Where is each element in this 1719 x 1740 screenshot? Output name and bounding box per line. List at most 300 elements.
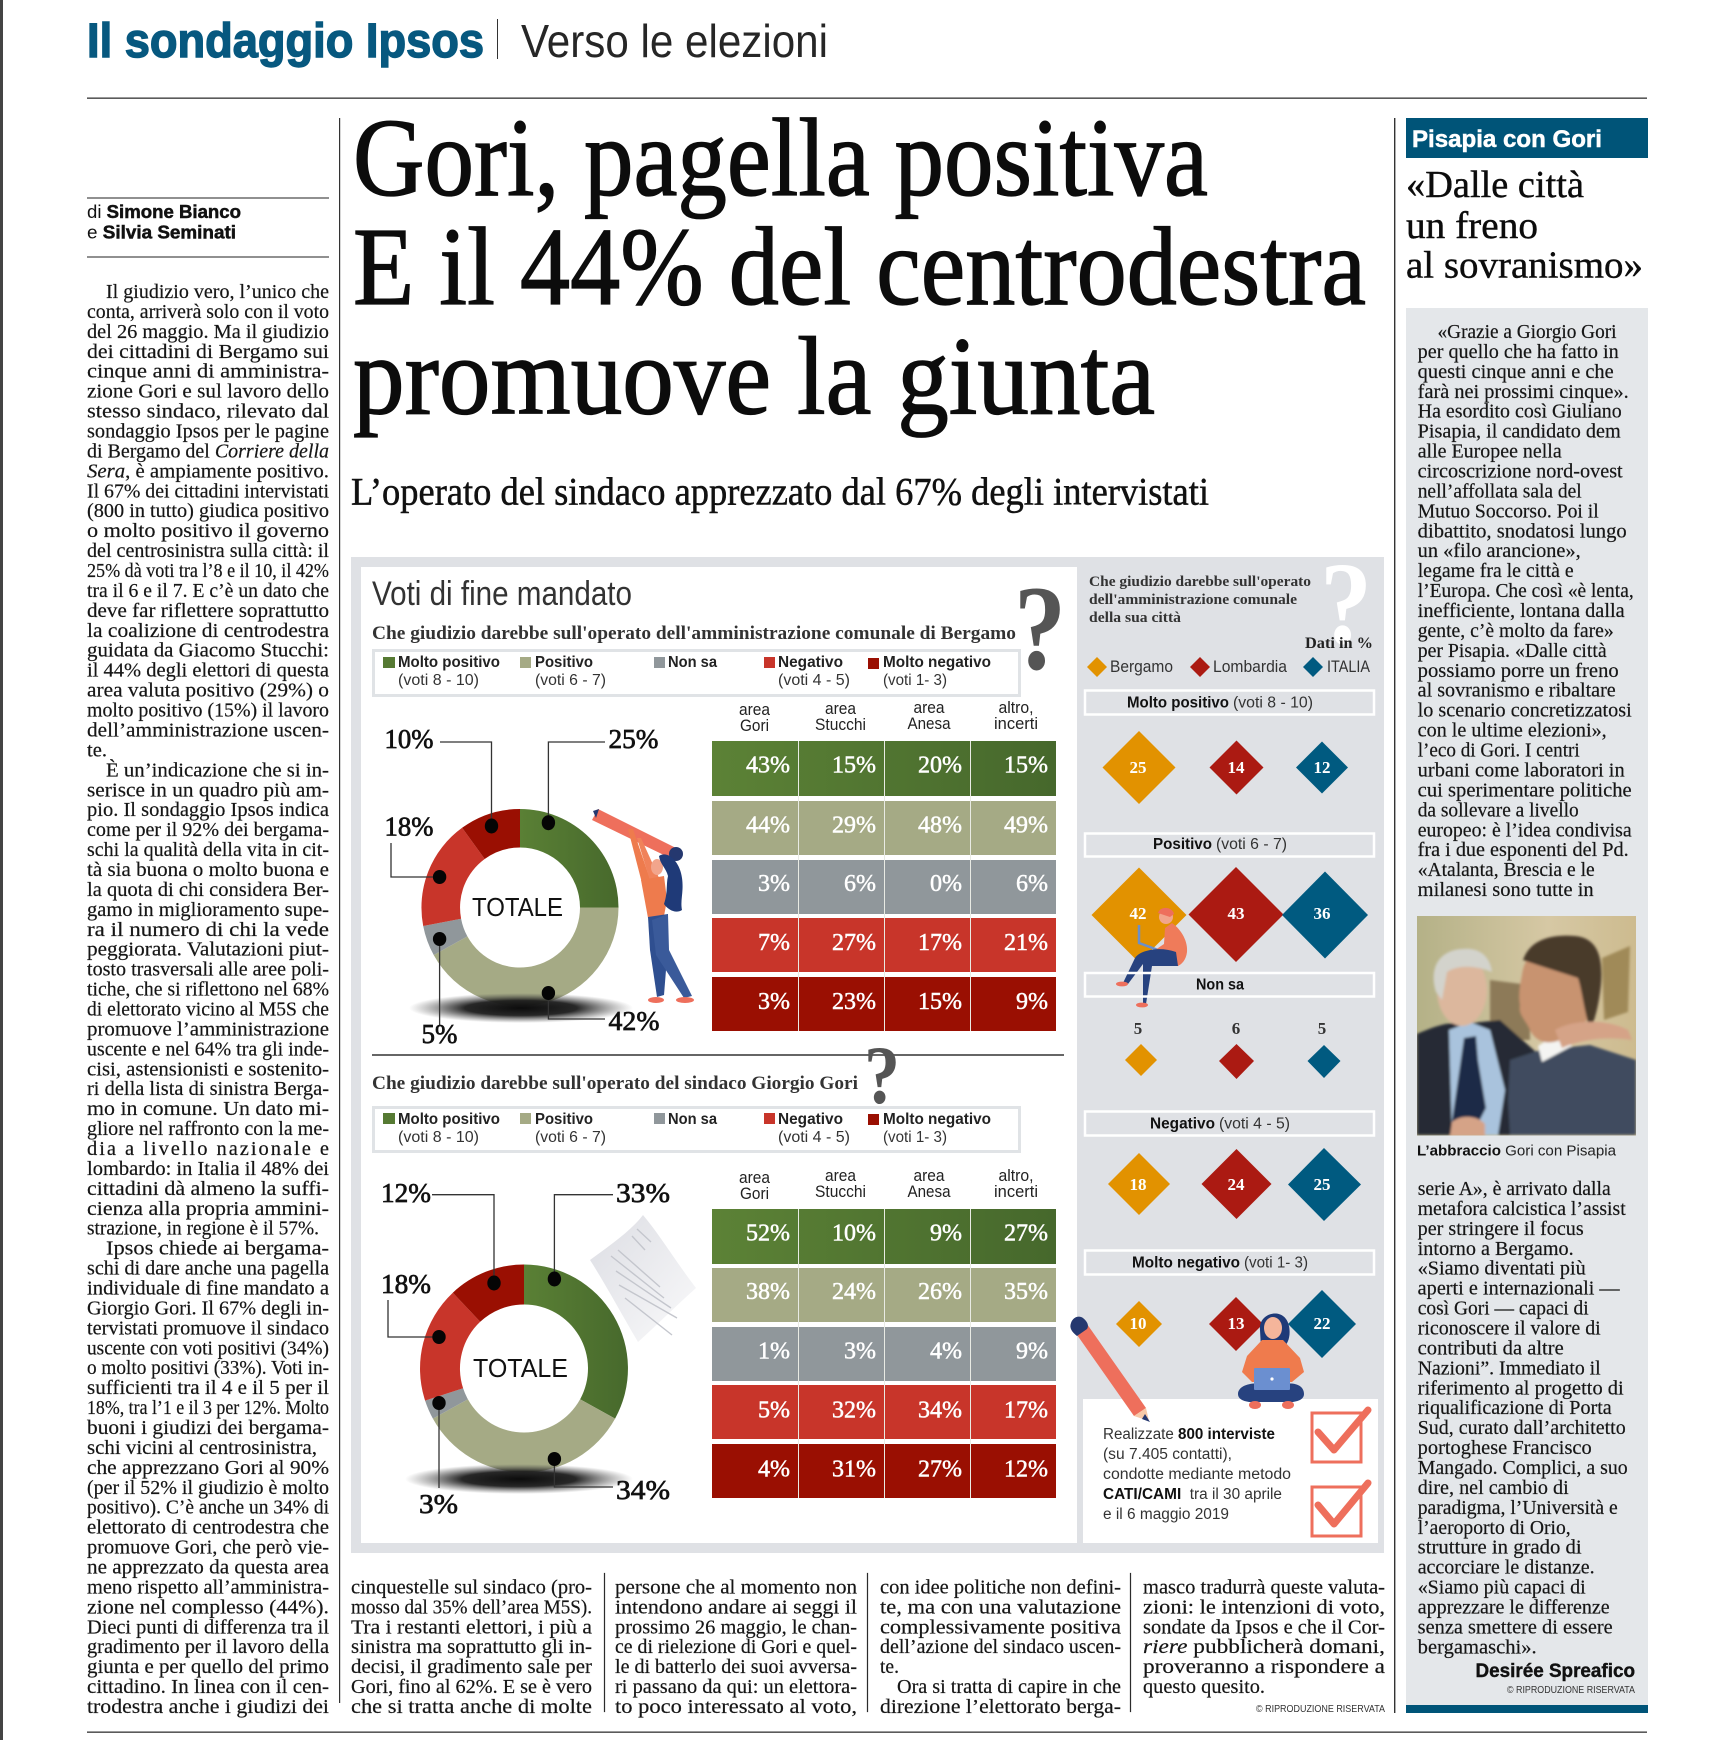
article text: left column: tà sia buona o molto buona e xyxy=(87,859,329,881)
article text: bottom columns: complessivamente positiva xyxy=(880,1616,1121,1638)
category: Negativo: 18 xyxy=(1130,1175,1146,1194)
sidebar text top: un «filo arancione», xyxy=(1418,540,1581,562)
table 2: area breakdown: 27% xyxy=(918,1456,962,1482)
sidebar copyright: © RIPRODUZIONE RISERVATA xyxy=(1507,1685,1635,1696)
table 1: area breakdown xyxy=(712,698,1056,1031)
article text: left column: Ipsos chiede ai bergama- xyxy=(106,1238,329,1260)
unit note: Dati in % xyxy=(1305,635,1373,652)
sidebar text top: questi cinque anni e che xyxy=(1418,361,1614,383)
article text: left column: 18%, tra l’1 e il 3 per 12%. Molto xyxy=(87,1397,329,1419)
category: Molto positivo: 14 xyxy=(1228,758,1245,777)
table 1: area breakdown: 23% xyxy=(832,989,876,1015)
article text: left column: te. xyxy=(87,739,107,761)
article text: bottom columns: proveranno a rispondere a xyxy=(1143,1656,1385,1678)
legend 2: Molto positivo xyxy=(398,1111,500,1128)
sidebar text bottom: aperti e internazionali — xyxy=(1418,1278,1621,1300)
article text: left column: Sera, è ampiamente positivo. xyxy=(87,460,329,482)
sidebar headline: un freno xyxy=(1406,205,1538,247)
donut chart 2: 33% xyxy=(616,1178,670,1208)
sidebar text top: lo scenario concretizzatosi xyxy=(1418,700,1632,722)
sidebar text top: Mutuo Soccorso. Poi il xyxy=(1418,500,1599,522)
subheading: L’operato del sindaco apprezzato dal 67% degli intervistati xyxy=(351,470,1209,514)
category: Molto negativo: (voti 1- 3) xyxy=(1244,1254,1308,1272)
legend 1: (voti 4 - 5) xyxy=(778,672,850,689)
article text: left column: mo in comune. Un dato mi- xyxy=(87,1098,329,1120)
kicker: Verso le elezioni: Verso le elezioni xyxy=(521,15,828,67)
question 1: Che giudizio darebbe sull'operato dell'amministrazione comunale di Bergamo xyxy=(372,623,1016,644)
article text: left column: del 26 maggio. Ma il giudizio xyxy=(87,321,329,343)
article text: left column: come per il 92% dei bergama- xyxy=(87,819,329,841)
category: Molto negativo: 22 xyxy=(1314,1314,1330,1333)
donut chart 1: 42% xyxy=(608,1006,660,1036)
legend 2: Non sa xyxy=(668,1111,717,1128)
illustration: sheet of paper xyxy=(590,1215,696,1342)
donut chart 1: 10% xyxy=(384,724,434,754)
article text: left column: promuove l’amministrazione xyxy=(87,1018,329,1040)
table 1: area breakdown: 29% xyxy=(832,812,876,838)
article text: left column: (800 in tutto) giudica positivo xyxy=(87,500,329,522)
sidebar header: Pisapia con Gori xyxy=(1412,126,1602,153)
article text: bottom columns: Tra i restanti elettori, i più a xyxy=(351,1616,592,1638)
article text: left column: la coalizione di centrodestra xyxy=(87,620,329,642)
byline: di Simone Bianco xyxy=(87,201,241,222)
icon: checkboxes xyxy=(1312,1410,1368,1536)
donut chart 2: 12% xyxy=(381,1178,431,1208)
table 1: area breakdown: 7% xyxy=(758,930,790,956)
category: Positivo xyxy=(1085,834,1374,962)
table 2: area breakdown: 27% xyxy=(1004,1220,1048,1246)
legend 1: Molto negativo xyxy=(883,654,991,671)
sidebar signature: Desirée Spreafico xyxy=(1476,1661,1635,1682)
article text: left column: positivo). C’è anche un 34% di xyxy=(87,1497,329,1519)
category: Non sa: 5 xyxy=(1134,1019,1142,1038)
table 1 column headers: area xyxy=(825,699,856,718)
article text: left column: individuale di fine mandato a xyxy=(87,1278,329,1300)
sidebar text bottom: «Siamo diventati più xyxy=(1418,1258,1586,1280)
category: Molto negativo: Molto negativo xyxy=(1132,1254,1240,1272)
article text: left column: È un’indicazione che si in- xyxy=(106,758,329,781)
article text: left column: pio. Il sondaggio Ipsos indica xyxy=(87,799,329,821)
table 2: area breakdown: 52% xyxy=(746,1220,790,1246)
sidebar text top: urbani come laboratori in xyxy=(1418,760,1625,782)
article text: bottom columns: le di batterlo dei suoi avversa- xyxy=(615,1656,857,1678)
legend 1: (voti 8 - 10) xyxy=(398,672,479,689)
article text: left column: zione Gori e sul lavoro dello xyxy=(87,381,329,403)
sidebar text bottom: dire, nel cambio di xyxy=(1418,1477,1569,1499)
category: Non sa: Non sa xyxy=(1196,976,1244,994)
table 1 column headers: area xyxy=(739,700,770,719)
article text: left column: Dieci punti di differenza tra il xyxy=(87,1616,329,1638)
sidebar text bottom xyxy=(1418,1178,1628,1658)
donut chart 1 xyxy=(384,724,660,1049)
article text: left column: molto positivo (15%) il lavoro xyxy=(87,700,329,722)
article text: left column: del centrosinistra sulla città: il xyxy=(87,540,329,562)
category: Molto positivo: Molto positivo xyxy=(1127,694,1229,712)
donut chart 2: 18% xyxy=(381,1269,431,1299)
table 2 column headers: Gori xyxy=(740,1184,769,1203)
article text: left column: tiche, che si riflettono nel 68% xyxy=(87,979,329,1001)
article text: bottom columns: zioni: le intenzioni di voto, xyxy=(1143,1596,1385,1618)
article text: bottom columns: riere pubblicherà domani, xyxy=(1143,1636,1385,1658)
table 1 column headers: Anesa xyxy=(908,714,951,733)
category: Negativo: (voti 4 - 5) xyxy=(1219,1116,1290,1132)
side legend: Lombardia xyxy=(1213,657,1288,676)
table 2 column headers: area xyxy=(914,1166,945,1185)
side legend xyxy=(1087,657,1371,677)
sidebar text top: nell’affollata sala del xyxy=(1418,480,1582,502)
article text: left column: ra il numero di chi la vede xyxy=(87,919,329,941)
article text: bottom columns: dell’azione del sindaco uscen- xyxy=(880,1636,1121,1658)
table 2: area breakdown: 5% xyxy=(758,1398,790,1424)
article text: left column: elettorato di centrodestra che xyxy=(87,1517,329,1539)
table 2 column headers xyxy=(739,1166,1038,1203)
sidebar text bottom: così Gori — capaci di xyxy=(1418,1298,1589,1320)
question 2: Che giudizio darebbe sull'operato del sindaco Giorgio Gori xyxy=(372,1073,858,1094)
table 1: area breakdown: 49% xyxy=(1004,812,1048,838)
legend 2 xyxy=(374,1108,1020,1152)
article text: left column: conta, arriverà solo con il voto xyxy=(87,301,329,323)
article text: bottom columns: ce di rielezione di Gori e quel- xyxy=(615,1636,857,1658)
sidebar text bottom: apprezzare le differenze xyxy=(1418,1596,1610,1618)
article text: bottom columns xyxy=(351,1573,1385,1718)
legend 2: (voti 8 - 10) xyxy=(398,1129,479,1146)
article text: left column: schi la qualità della vita in cit- xyxy=(87,839,329,861)
side chart question: della sua città xyxy=(1089,610,1182,626)
sidebar text top: fra i due esponenti del Pd. xyxy=(1418,839,1629,861)
table 2: area breakdown: 10% xyxy=(832,1220,876,1246)
article text: left column: buoni i giudizi dei bergama- xyxy=(87,1417,329,1439)
sidebar text bottom: portoghese Francisco xyxy=(1418,1437,1592,1459)
category: Molto positivo xyxy=(1085,690,1374,804)
table 1 column headers: incerti xyxy=(994,714,1038,733)
table 1 column headers: Gori xyxy=(740,716,769,735)
table 1: area breakdown: 3% xyxy=(758,989,790,1015)
article text: bottom columns: decisi, il gradimento sale per xyxy=(351,1656,592,1678)
illustration: large pencil xyxy=(1070,1317,1150,1422)
category: Non sa: 6 xyxy=(1232,1019,1240,1038)
article text: left column: serisce in un quadro più am- xyxy=(87,779,329,801)
legend 2: Positivo xyxy=(535,1111,593,1128)
article text: left column: di Bergamo del Corriere della xyxy=(87,440,329,462)
sidebar text bottom: l’aeroporto di Orio, xyxy=(1418,1517,1571,1539)
article text: left column: 25% dà voti tra l’8 e il 10, il 42% xyxy=(87,560,329,582)
table 2 column headers: Anesa xyxy=(908,1182,951,1201)
sidebar text bottom: «Siamo più capaci di xyxy=(1418,1577,1586,1599)
article text: bottom columns: © RIPRODUZIONE RISERVATA xyxy=(1256,1704,1385,1715)
article text: bottom columns: che si tratta anche di molte xyxy=(351,1696,592,1718)
article text: left column: Il 67% dei cittadini intervistati xyxy=(87,480,329,502)
sidebar text top: Pisapia, il candidato dem xyxy=(1418,421,1621,443)
category: Molto negativo: 10 xyxy=(1130,1314,1146,1333)
table 2: area breakdown: 34% xyxy=(918,1398,962,1424)
article text: left column: tra il 6 e il 7. E c’è un dato che xyxy=(87,580,329,602)
category: Molto negativo: 13 xyxy=(1228,1314,1244,1333)
icon: question mark 2: ? xyxy=(864,1029,900,1121)
article text: left column: cienza alla propria ammini- xyxy=(87,1198,329,1220)
article text: left column: Giorgio Gori. Il 67% degli in- xyxy=(87,1297,329,1319)
article text: left column: il 44% degli elettori di questa xyxy=(87,660,329,682)
table 2: area breakdown: 17% xyxy=(1004,1398,1048,1424)
legend 2: (voti 4 - 5) xyxy=(778,1129,850,1146)
article text: left column: guidata da Giacomo Stucchi: xyxy=(87,640,329,662)
article text: bottom columns: mosso dal 35% dell’area M5S). xyxy=(351,1596,592,1618)
sidebar text top: «Atalanta, Brescia e le xyxy=(1418,859,1595,881)
legend 2: (voti 6 - 7) xyxy=(535,1129,606,1146)
table 2: area breakdown: 4% xyxy=(930,1338,962,1364)
table 2: area breakdown: 9% xyxy=(1016,1338,1048,1364)
side chart question xyxy=(1089,574,1311,626)
table 1: area breakdown: 0% xyxy=(930,871,962,897)
article text: left column: sondaggio Ipsos per le pagine xyxy=(87,420,329,442)
donut chart 1: 18% xyxy=(384,812,434,842)
category: Molto negativo xyxy=(1085,1250,1374,1358)
category: Positivo: (voti 6 - 7) xyxy=(1216,836,1287,853)
sidebar text top: inefficiente, lontana dalla xyxy=(1418,600,1625,622)
methodology box: Realizzate 800 interviste xyxy=(1103,1426,1275,1443)
article text: left column: cinque anni di amministra- xyxy=(87,361,329,383)
sidebar text bottom: riferimento al progetto di xyxy=(1418,1377,1624,1399)
donut chart 2: TOTALE xyxy=(473,1353,568,1383)
category: Non sa xyxy=(1085,973,1374,1079)
article text: left column: lombardo: in Italia il 48% dei xyxy=(87,1158,329,1180)
table 1: area breakdown: 44% xyxy=(746,812,790,838)
donut chart 1: TOTALE xyxy=(472,892,563,922)
donut chart 1: 25% xyxy=(608,724,658,754)
sidebar text top: legame fra le città e xyxy=(1418,560,1574,582)
table 1: area breakdown: 15% xyxy=(1004,752,1048,778)
side legend: ITALIA xyxy=(1327,657,1371,676)
category: Molto positivo: 25 xyxy=(1130,758,1146,777)
article text: left column: dia a livello nazionale e xyxy=(87,1138,329,1160)
table 2: area breakdown xyxy=(712,1166,1056,1498)
table 1 column headers xyxy=(739,698,1038,735)
legend 2: (voti 1- 3) xyxy=(883,1129,947,1146)
category: Negativo: 24 xyxy=(1228,1175,1245,1194)
article text: bottom columns: masco tradurrà queste valuta- xyxy=(1143,1576,1385,1598)
article text: left column: o molto positivi (33%). Voti in- xyxy=(87,1357,329,1379)
table 1: area breakdown: 27% xyxy=(832,930,876,956)
table 2: area breakdown: 31% xyxy=(832,1456,876,1482)
methodology box: condotte mediante metodo xyxy=(1103,1466,1291,1483)
side legend: Bergamo xyxy=(1110,657,1173,676)
header: kicker xyxy=(87,15,828,68)
sidebar text top: l’eco di Gori. I centri xyxy=(1418,740,1580,762)
article text: left column: strazione, in regione è il 57%. xyxy=(87,1218,319,1240)
legend 2: Molto negativo xyxy=(883,1111,991,1128)
article text: left column: o molto positivo il governo xyxy=(87,520,329,542)
icon: white question mark: ? xyxy=(1320,538,1372,669)
article text: bottom columns: sondate da Ipsos e che il Cor- xyxy=(1143,1616,1385,1638)
article text: bottom columns: prossimo 26 maggio, le chan- xyxy=(615,1616,857,1638)
category: Negativo: 25 xyxy=(1314,1175,1330,1194)
article text: bottom columns: direzione l’elettorato berga- xyxy=(880,1696,1121,1718)
article text: left column: gradimento per il lavoro della xyxy=(87,1636,329,1658)
sidebar text top: l’Europa. Che così «è lenta, xyxy=(1418,580,1634,602)
sidebar panel xyxy=(1406,308,1648,1713)
side chart question: Che giudizio darebbe sull'operato xyxy=(1089,574,1311,590)
sidebar text bottom: Mangado. Complici, a suo xyxy=(1418,1457,1628,1479)
article text: bottom columns: intendono andare ai seggi il xyxy=(615,1596,857,1618)
table 2: area breakdown: 3% xyxy=(844,1338,876,1364)
sidebar text top: possiamo porre un freno xyxy=(1418,660,1619,682)
article text: left column: dell’amministrazione uscen- xyxy=(87,719,329,741)
sidebar text top: circoscrizione nord-ovest xyxy=(1418,460,1623,482)
table 1: area breakdown: 6% xyxy=(844,871,876,897)
article text: left column: uscente e nel 64% tra gli inde- xyxy=(87,1038,329,1060)
article text: left column: schi vicini al centrosinistra, xyxy=(87,1437,317,1459)
sidebar text bottom: Nazioni”. Immediato il xyxy=(1418,1357,1601,1379)
article text: bottom columns: questo quesito. xyxy=(1143,1676,1265,1698)
main headline: promuove la giunta xyxy=(353,316,1155,438)
category: Negativo xyxy=(1085,1112,1374,1221)
sidebar text top: dibattito, snodatosi lungo xyxy=(1418,520,1627,542)
sidebar text bottom: riqualificazione di Porta xyxy=(1418,1397,1612,1419)
article text: left column: cisi, astensionisti e sostenito- xyxy=(87,1058,329,1080)
sidebar text bottom: riconoscere il valore di xyxy=(1418,1318,1601,1340)
article text: bottom columns: te. xyxy=(880,1656,899,1678)
byline: e Silvia Seminati xyxy=(87,222,236,242)
donut chart 1: 5% xyxy=(422,1019,458,1049)
sidebar text top: con le ultime elezioni», xyxy=(1418,720,1607,742)
sidebar text top: da sollevare a livello xyxy=(1418,799,1579,821)
legend 1: Negativo xyxy=(778,654,843,671)
sidebar text top: per Pisapia. «Dalle città xyxy=(1418,640,1607,662)
panel: infographic xyxy=(351,538,1384,1553)
table 2: area breakdown: 38% xyxy=(746,1279,790,1305)
methodology box: CATI/CAMI tra il 30 aprile xyxy=(1103,1486,1282,1503)
article text: left column: sufficienti tra il 4 e il 5 per il xyxy=(87,1377,329,1399)
table 2: area breakdown: 32% xyxy=(832,1398,876,1424)
donut chart 2: 34% xyxy=(616,1475,670,1505)
category: Positivo: 36 xyxy=(1314,904,1330,923)
main headline: E il 44% del centrodestra xyxy=(353,206,1366,329)
article text: left column: gamo in miglioramento supe- xyxy=(87,899,329,921)
table 2 column headers: incerti xyxy=(994,1182,1038,1201)
article text: left column: cittadini dà almeno la suffi- xyxy=(87,1178,329,1200)
article text: left column: di elettorato vicino al M5S che xyxy=(87,998,329,1020)
article text: bottom columns: to poco interessato al voto, xyxy=(615,1696,857,1718)
article text: left column: uscente con voti positivi (34%) xyxy=(87,1337,329,1359)
methodology box: (su 7.405 contatti), xyxy=(1103,1446,1232,1463)
sidebar text top: gente, c’è molto da fare» xyxy=(1418,620,1614,642)
article text: left column: promuove Gori, che però vie- xyxy=(87,1537,329,1559)
legend 1: Molto positivo xyxy=(398,654,500,671)
article text: bottom columns: cinquestelle sul sindaco (pro- xyxy=(351,1576,592,1598)
sidebar text bottom: senza smettere di essere xyxy=(1418,1616,1613,1638)
icon: question mark: ? xyxy=(1014,562,1066,696)
article text: left column: gliore nel raffronto con la me- xyxy=(87,1118,329,1140)
article text: left column: dei cittadini di Bergamo sui xyxy=(87,341,329,363)
sidebar text bottom: paradigma, l’Università e xyxy=(1418,1497,1618,1519)
legend 1 xyxy=(374,650,1020,696)
sidebar text bottom: strutture in grado di xyxy=(1418,1537,1582,1559)
legend 1: Positivo xyxy=(535,654,593,671)
sidebar text top: Ha esordito così Giuliano xyxy=(1418,401,1622,423)
byline xyxy=(87,198,329,258)
legend 1: (voti 1- 3) xyxy=(883,672,947,689)
article text: left column: Il giudizio vero, l’unico che xyxy=(106,281,329,303)
table 2: area breakdown: 4% xyxy=(758,1456,790,1482)
article text: bottom columns: Ora si tratta di capire in che xyxy=(897,1676,1121,1698)
table 1: area breakdown: 6% xyxy=(1016,871,1048,897)
table 1: area breakdown: 21% xyxy=(1004,930,1048,956)
article text: left column: cittadino. In linea con il cen- xyxy=(87,1676,329,1698)
table 2: area breakdown: 26% xyxy=(918,1279,962,1305)
category: Positivo: Positivo xyxy=(1153,836,1212,853)
table 2: area breakdown: 24% xyxy=(832,1279,876,1305)
sidebar headline xyxy=(1406,164,1643,286)
kicker: Il sondaggio Ipsos: Il sondaggio Ipsos xyxy=(87,15,484,68)
table 1: area breakdown: 17% xyxy=(918,930,962,956)
table 2: area breakdown: 1% xyxy=(758,1338,790,1364)
category: Positivo: 43 xyxy=(1228,904,1244,923)
table 2 column headers: area xyxy=(825,1166,856,1185)
article text: left column: zione nel complesso (44%). xyxy=(87,1596,329,1618)
article text: left column xyxy=(87,281,329,1718)
article text: left column: deve far riflettere soprattutto xyxy=(87,600,329,622)
illustration: man with laptop xyxy=(1116,908,1187,1007)
article text: left column: ne apprezzato da questa area xyxy=(87,1556,329,1578)
table 1: area breakdown: 20% xyxy=(918,752,962,778)
table 1: area breakdown: 15% xyxy=(918,989,962,1015)
category: Non sa: 5 xyxy=(1318,1019,1326,1038)
category: Molto positivo: (voti 8 - 10) xyxy=(1233,694,1313,712)
article text: left column: la quota di chi considera Ber- xyxy=(87,879,329,901)
table 2 column headers: altro, xyxy=(998,1166,1034,1185)
sidebar text top: per quello che ha fatto in xyxy=(1418,341,1619,363)
sidebar text top: milanesi sono tutte in xyxy=(1418,879,1594,901)
table 2 column headers: area xyxy=(739,1168,770,1187)
table 1 column headers: area xyxy=(914,698,945,717)
sidebar text bottom: Sud, curato dall’architetto xyxy=(1418,1417,1626,1439)
article text: bottom columns: ri passano da qui: un elettora- xyxy=(615,1676,857,1698)
article text: left column: (per il 52% il giudizio è molto xyxy=(87,1477,329,1499)
table 2 column headers: Stucchi xyxy=(815,1182,866,1201)
sidebar text bottom: per stringere il focus xyxy=(1418,1218,1584,1240)
article text: bottom columns: con idee politiche non defini- xyxy=(880,1576,1121,1598)
sidebar header xyxy=(1406,118,1648,158)
sidebar text bottom: accorciare le distanze. xyxy=(1418,1557,1595,1579)
sidebar headline: al sovranismo» xyxy=(1406,244,1643,286)
legend 2: Negativo xyxy=(778,1111,843,1128)
methodology box xyxy=(1083,1399,1378,1543)
legend 1: (voti 6 - 7) xyxy=(535,672,606,689)
table 1 column headers: Stucchi xyxy=(815,715,866,734)
sidebar text bottom: intorno a Bergamo. xyxy=(1418,1238,1574,1260)
side chart question: dell'amministrazione comunale xyxy=(1089,592,1297,608)
category: Positivo: 42 xyxy=(1130,904,1146,923)
sidebar text top: alle Europee nella xyxy=(1418,441,1562,463)
methodology box: e il 6 maggio 2019 xyxy=(1103,1506,1229,1523)
illustration: woman with pencil xyxy=(592,809,694,1003)
sidebar text bottom: metafora calcistica l’assist xyxy=(1418,1198,1626,1220)
main headline xyxy=(353,97,1366,438)
table 2: area breakdown: 12% xyxy=(1004,1456,1048,1482)
chart title: Voti di fine mandato: Voti di fine mandato xyxy=(372,575,632,613)
sidebar headline: «Dalle città xyxy=(1406,164,1584,206)
category: Negativo: Negativo xyxy=(1150,1116,1215,1132)
article text: left column: tosto trasversali alle aree poli- xyxy=(87,959,329,981)
table 1: area breakdown: 15% xyxy=(832,752,876,778)
main headline: Gori, pagella positiva xyxy=(353,97,1208,220)
table 2: area breakdown: 9% xyxy=(930,1220,962,1246)
side chart: comparison Bergamo Lombardia Italia xyxy=(1070,538,1378,1543)
table 1: area breakdown: 3% xyxy=(758,871,790,897)
legend 1: Non sa xyxy=(668,654,717,671)
sidebar text top: cui sperimentare politiche xyxy=(1418,779,1632,801)
photo: Gori and Pisapia embrace xyxy=(1417,916,1636,1136)
article text: left column: area valuta positivo (29%) o xyxy=(87,680,329,702)
